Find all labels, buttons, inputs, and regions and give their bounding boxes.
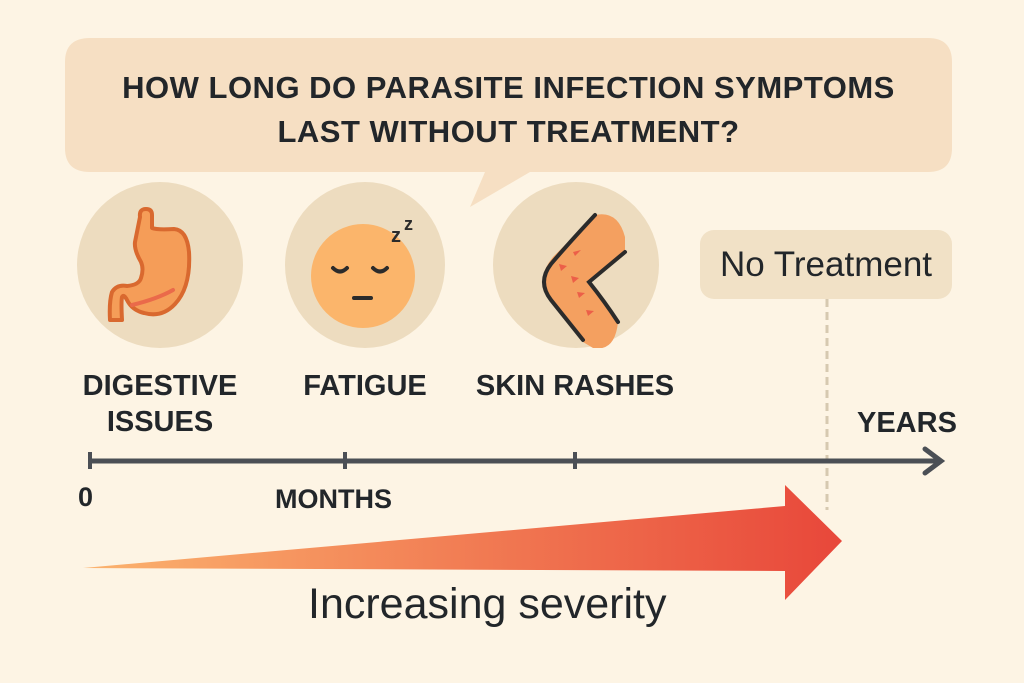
icon: sleepy face: z [391, 225, 401, 247]
symptom labels [83, 370, 237, 438]
No Treatment label [700, 230, 952, 299]
text: MONTHS [275, 484, 392, 514]
title text: HOW LONG DO PARASITE INFECTION SYMPTOMS [122, 70, 895, 105]
symptom labels: ISSUES [107, 406, 213, 438]
icon: sleepy face: z [404, 214, 413, 234]
symptom labels: DIGESTIVE [83, 370, 237, 402]
speech bubble title [65, 38, 952, 207]
text: YEARS [857, 407, 957, 439]
icon: sleepy face [285, 182, 445, 348]
No Treatment label: No Treatment [720, 245, 932, 284]
text: FATIGUE [303, 370, 427, 402]
severity caption: Increasing severity [308, 580, 666, 628]
severity arrow [83, 485, 842, 600]
title text: LAST WITHOUT TREATMENT? [277, 114, 740, 149]
icon: stomach [77, 182, 243, 348]
text: SKIN RASHES [476, 370, 674, 402]
icon: arm with rash [493, 182, 659, 348]
title text [122, 70, 895, 149]
axis labels: 0 [78, 482, 93, 512]
